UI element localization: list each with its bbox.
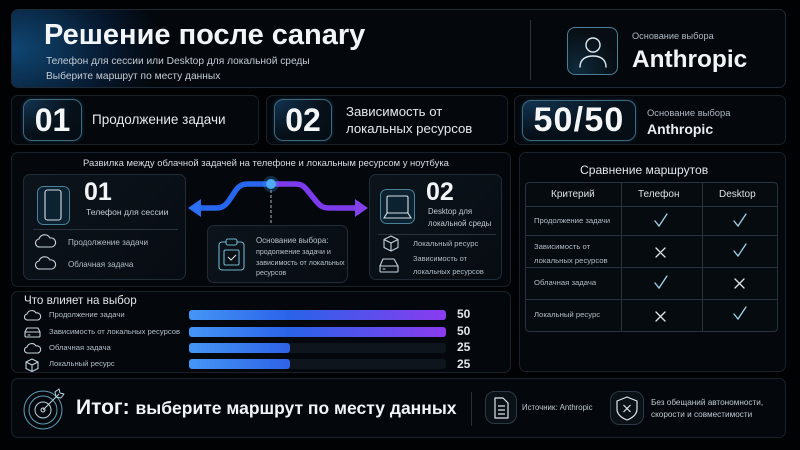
bar chart: Облачная задача	[49, 343, 111, 352]
conclusion: Итог: выберите маршрут по месту данных	[76, 396, 456, 419]
source: Источник: Anthropic	[522, 403, 593, 412]
callout text: зависимость от локальных	[256, 259, 344, 267]
panel: card 50/50: Anthropic	[647, 121, 713, 137]
comparison table: Телефон	[638, 189, 679, 200]
panel: card 50/50: 50/50	[533, 101, 625, 139]
row: dependency	[24, 328, 41, 338]
comparison heading: Сравнение маршрутов	[580, 163, 708, 177]
item: drive	[379, 258, 399, 272]
route number: 01	[84, 178, 112, 206]
callout text: продолжение задачи и	[256, 248, 331, 256]
route name	[428, 207, 491, 228]
item: cloud 1	[34, 234, 56, 248]
callout text	[256, 236, 344, 277]
icon: clipboard	[218, 238, 245, 270]
icon: document	[485, 391, 517, 424]
divider	[471, 392, 472, 426]
disclaimer	[651, 398, 763, 419]
panel: route fork	[11, 152, 511, 287]
fork heading: Развилка между облачной задачей на телефоне и локальным ресурсом у ноутбука	[83, 158, 449, 169]
comparison table: Desktop	[719, 189, 756, 200]
row: continuation	[24, 310, 42, 321]
row: local	[25, 358, 39, 372]
bar chart: Продолжение задачи	[49, 310, 125, 319]
panel: phone route: Продолжение задачи	[68, 238, 148, 247]
comparison table: Зависимость от	[534, 242, 590, 251]
icon: shield	[610, 391, 644, 425]
panel: phone route: Облачная задача	[68, 260, 133, 269]
item: cloud 2	[34, 256, 56, 270]
panel: desktop route: локальных ресурсов	[413, 266, 484, 276]
comparison table: Локальный ресурс	[534, 310, 600, 319]
route number: 02	[426, 178, 454, 206]
basis label: Основание выбора	[632, 31, 714, 41]
icon: phone	[37, 186, 70, 225]
panel: card 50/50: Основание выбора	[647, 107, 730, 118]
icon: laptop	[380, 189, 415, 224]
panel: comparison	[519, 152, 786, 372]
marks	[654, 213, 747, 322]
subtitle: Телефон для сессии или Desktop для локальной среды	[46, 56, 310, 67]
disclaimer: скорости и совместимости	[651, 410, 752, 419]
bar chart: 25	[457, 357, 470, 371]
panel: card 01	[11, 95, 259, 145]
panel: card 02	[266, 95, 508, 145]
bar chart: 50	[457, 324, 470, 338]
panel: desktop route	[369, 174, 502, 280]
bar chart	[24, 307, 470, 372]
comparison table: Продолжение задачи	[534, 216, 610, 225]
panel: desktop route: Локальный ресурс	[413, 239, 478, 248]
bar chart: 50	[457, 307, 470, 321]
bar chart: Локальный ресурс	[49, 359, 115, 368]
panel: header	[11, 9, 786, 88]
panel: card 02: Зависимость от	[346, 104, 442, 119]
icon: target	[24, 388, 64, 430]
panel: card 50/50	[514, 95, 786, 145]
panel: footer	[11, 378, 786, 438]
route name: Телефон для сессии	[86, 207, 168, 217]
panel: card 02: 02	[285, 102, 321, 138]
comparison table: Критерий	[551, 189, 595, 200]
bar chart: Зависимость от локальных ресурсов	[49, 327, 180, 336]
disclaimer: Без обещаний автономности,	[651, 398, 763, 407]
panel: phone route	[23, 174, 186, 280]
comparison table	[525, 182, 778, 332]
panel: influences chart	[11, 291, 511, 373]
panel: card 01: Продолжение задачи	[92, 112, 226, 127]
route name: Desktop для	[428, 207, 472, 216]
panel: card 02: локальных ресурсов	[346, 121, 472, 136]
divider	[530, 20, 531, 80]
panel: basis callout	[207, 225, 348, 283]
callout text: Основание выбора:	[256, 236, 328, 245]
icon: person	[567, 27, 618, 75]
panel: desktop route: Зависимость от	[413, 254, 467, 263]
callout text: ресурсов	[256, 269, 286, 277]
route name: локальной среды	[428, 219, 491, 228]
comparison table: локальных ресурсов	[534, 256, 608, 264]
title: Решение после canary	[44, 19, 365, 51]
comparison table: Облачная задача	[534, 278, 596, 287]
panel: card 01: 01	[35, 102, 70, 138]
bar chart: 25	[457, 340, 470, 354]
basis value: Anthropic	[632, 46, 747, 73]
subtitle	[46, 56, 310, 82]
row: cloud	[24, 343, 42, 354]
chart heading: Что влияет на выбор	[24, 294, 137, 307]
item: cube	[383, 236, 399, 252]
subtitle: Выберите маршрут по месту данных	[46, 71, 220, 82]
